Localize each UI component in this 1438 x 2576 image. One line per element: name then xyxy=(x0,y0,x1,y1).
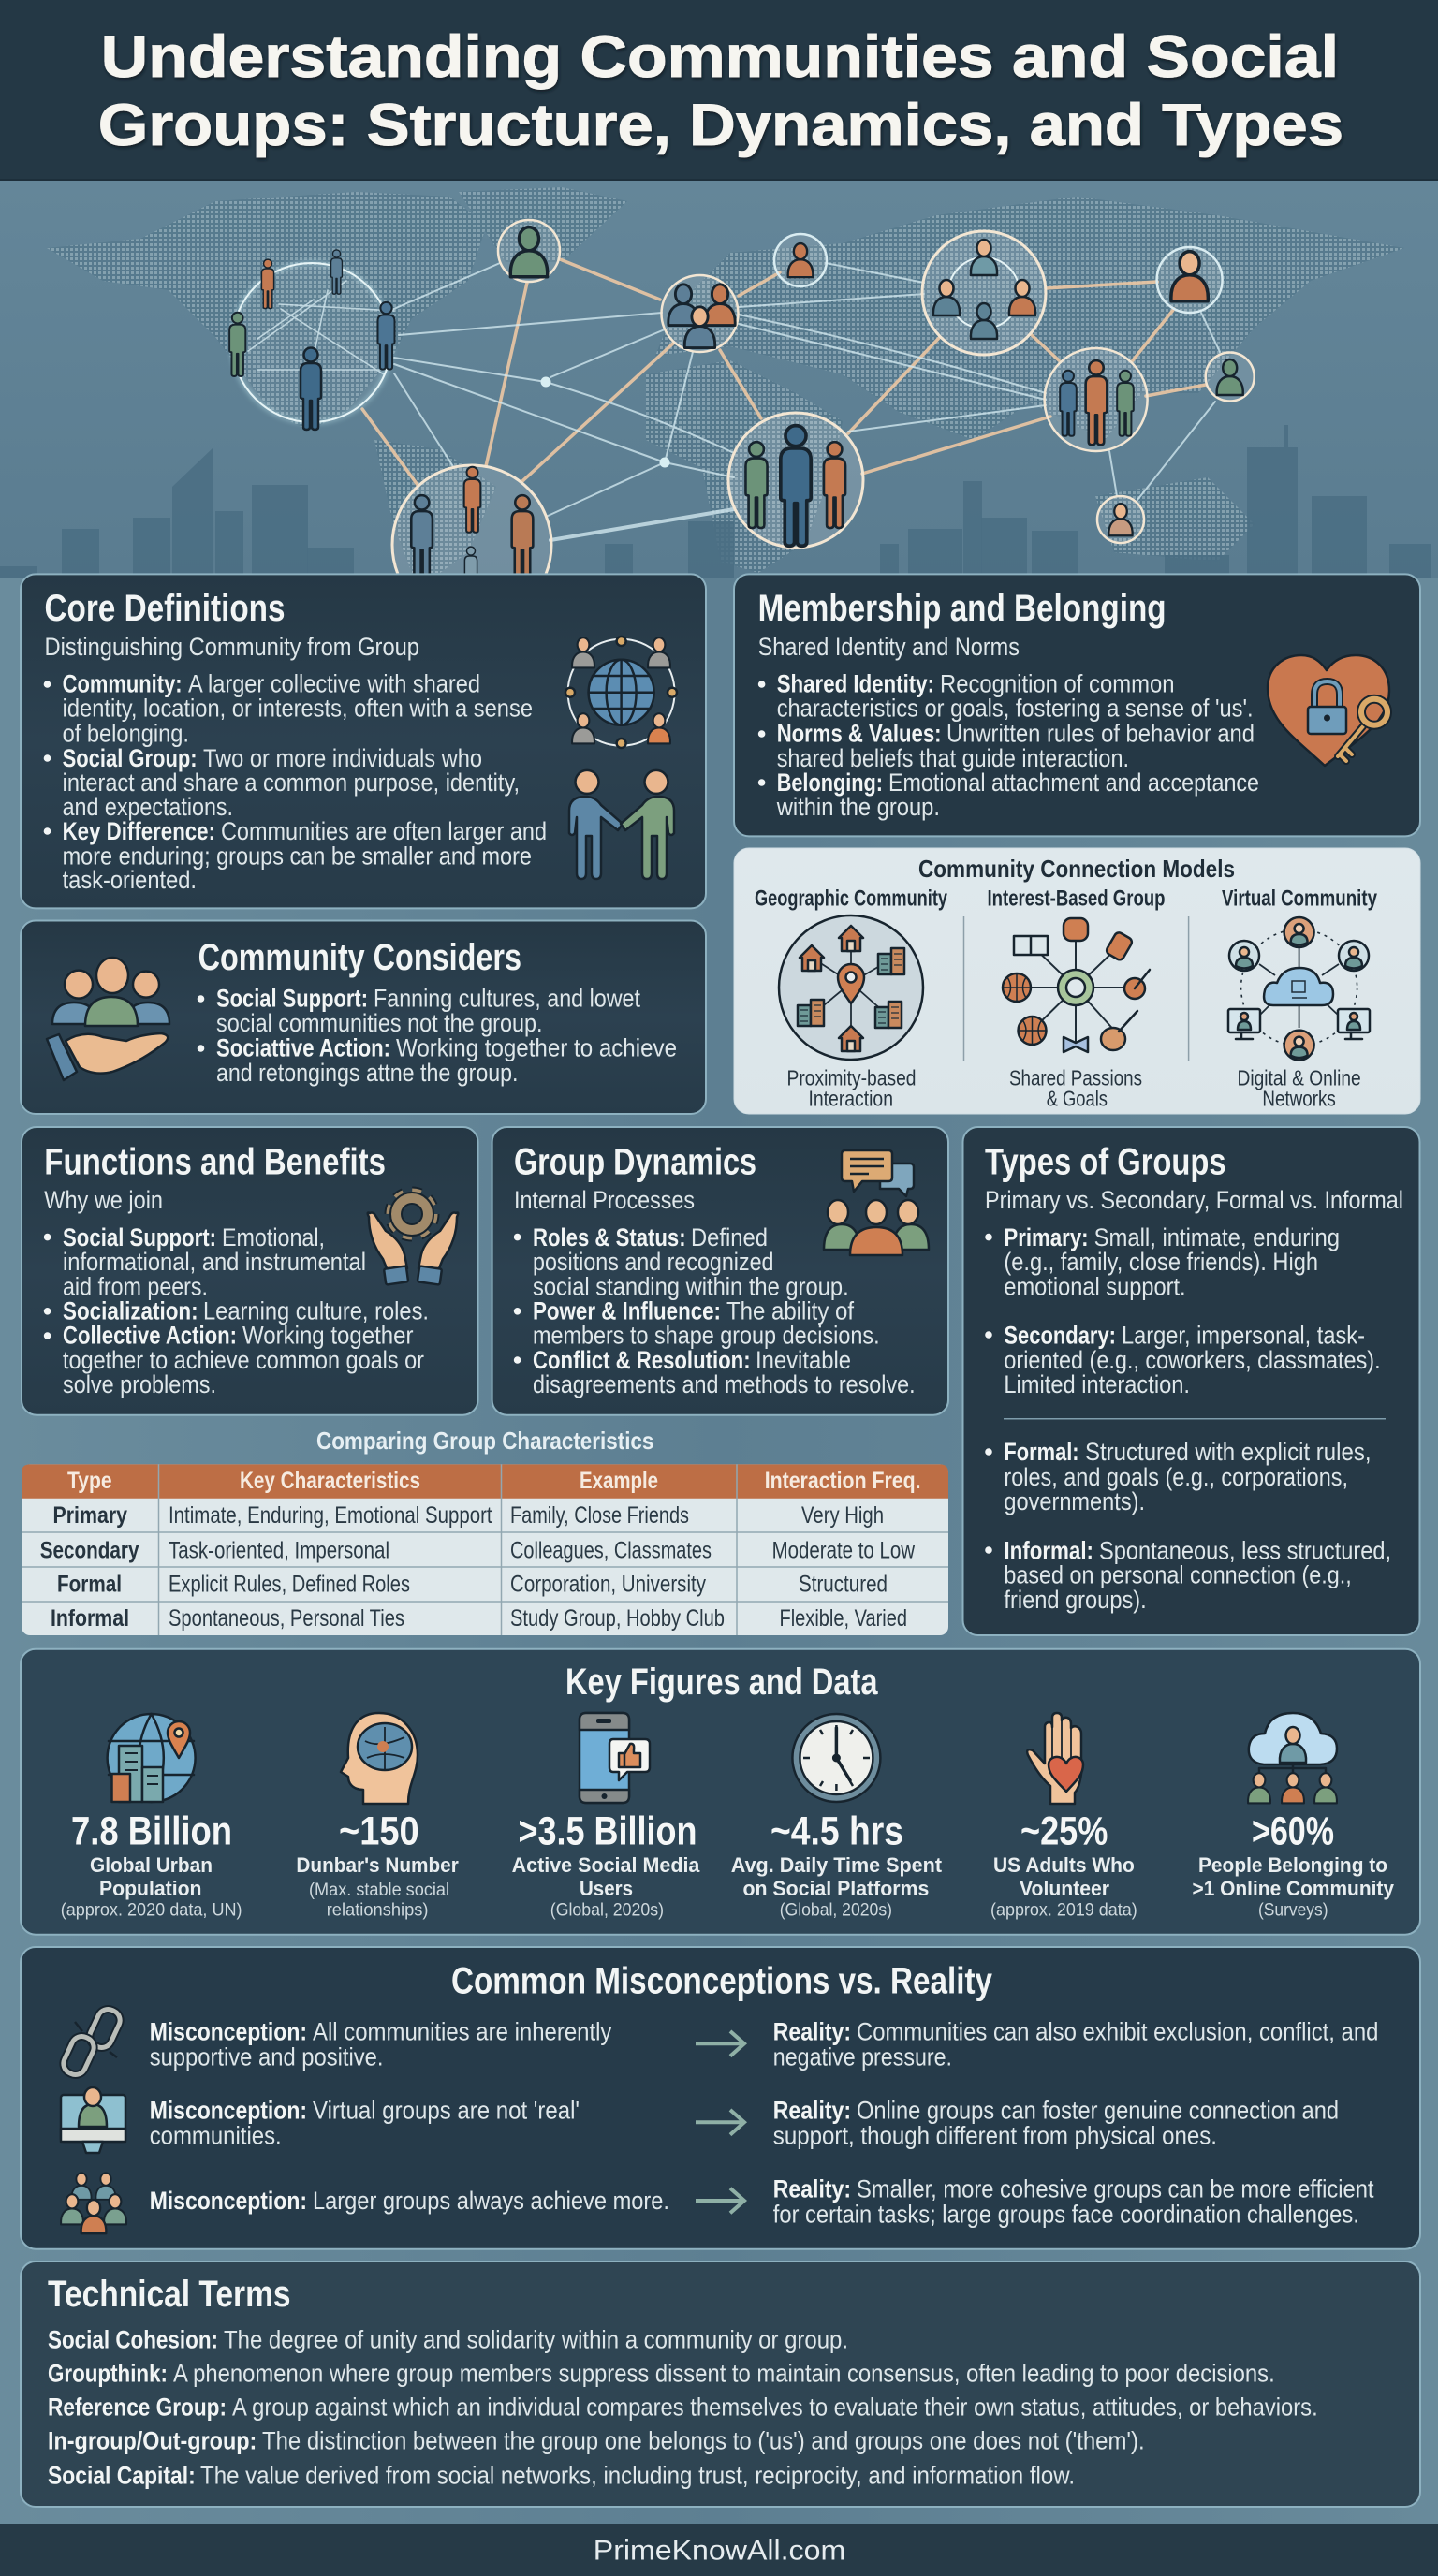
caption: shared passions and goals xyxy=(1009,1065,1142,1111)
term: in-group/out-group: The distinction between the group one belongs to ('us') and groups one does not ('them'). xyxy=(262,2427,1145,2455)
panel: membership and belonging xyxy=(734,574,1420,836)
bullet: social group: and expectations. xyxy=(63,793,233,821)
label: relationships) xyxy=(327,1901,429,1921)
misconception text xyxy=(150,2187,669,2215)
caption: shared passions and goals: & Goals xyxy=(1047,1087,1108,1111)
bullet: sociattive action: Sociattive Action: xyxy=(216,1033,390,1061)
header band xyxy=(0,0,1438,181)
hero: world network illustration xyxy=(0,181,1438,624)
misconception text: supportive and positive. xyxy=(150,2043,384,2071)
bullet: roles and status: Defined xyxy=(691,1223,768,1251)
panel: core definitions xyxy=(21,574,706,908)
bullet: formal: Structured with explicit rules, xyxy=(1085,1438,1371,1466)
label xyxy=(512,1853,700,1921)
bullet: secondary: oriented (e.g., coworkers, classmates). xyxy=(1004,1346,1381,1374)
network junction dots xyxy=(541,376,670,468)
stat: us adults who volunteer xyxy=(990,1713,1137,1921)
term: reference group: A group against which an individual compares themselves to evaluate their own status, attitudes, or behaviors. xyxy=(232,2393,1318,2422)
row 3 xyxy=(61,2173,1374,2233)
bullet: social support: Emotional, xyxy=(222,1223,325,1251)
icon: head with brain xyxy=(341,1713,418,1804)
subheading: Internal Processes xyxy=(514,1186,695,1214)
column heading: interest-based group: Interest-Based Group xyxy=(987,886,1165,911)
bullet: roles and status xyxy=(514,1223,849,1300)
label xyxy=(731,1853,943,1921)
term: social cohesion: The degree of unity and solidarity within a community or group. xyxy=(224,2325,848,2353)
table row: formal: Structured xyxy=(799,1572,888,1598)
table row: secondary xyxy=(40,1537,916,1563)
bullet: sociattive action xyxy=(198,1033,677,1087)
reality text xyxy=(773,2174,1374,2229)
bullet: conflict and resolution: Inevitable xyxy=(756,1346,851,1374)
bullet: socialization: Learning culture, roles. xyxy=(203,1297,429,1325)
network connection lines: orange xyxy=(362,259,1206,485)
bullet: community: of belonging. xyxy=(63,719,189,747)
term: social capital: The value derived from social networks, including trust, reciprocity, and information flow. xyxy=(200,2461,1075,2489)
bullet: primary: (e.g., family, close friends). High xyxy=(1004,1248,1318,1276)
icon: phone with thumbs up xyxy=(580,1713,650,1803)
panel: technical terms xyxy=(21,2261,1420,2507)
label xyxy=(990,1853,1137,1921)
bullet: formal xyxy=(985,1438,1371,1515)
bullet: social support: aid from peers. xyxy=(63,1272,208,1300)
term: groupthink: A phenomenon where group members suppress dissent to maintain consensus, often leading to poor decisions. xyxy=(173,2359,1275,2387)
table row: primary xyxy=(52,1502,884,1529)
bullet: norms and values: Norms & Values: xyxy=(777,719,942,747)
misconception text xyxy=(150,2096,580,2150)
label xyxy=(61,1853,242,1921)
table row: formal: Explicit Rules, Defined Roles xyxy=(169,1572,410,1598)
bullet: shared identity: Recognition of common xyxy=(940,670,1174,698)
heading: Key Figures and Data xyxy=(565,1661,878,1703)
value: >3.5 Billion xyxy=(519,1809,697,1854)
bullet: key difference xyxy=(44,817,547,894)
panel: group dynamics xyxy=(492,1127,948,1415)
table row: primary: Very High xyxy=(801,1502,884,1529)
table row: formal: Formal xyxy=(57,1572,122,1598)
bullet: primary xyxy=(985,1223,1340,1300)
node: bottom left group xyxy=(392,465,551,624)
table header row: Interaction Freq. xyxy=(765,1468,921,1494)
bullet: informal: friend groups). xyxy=(1004,1586,1147,1614)
label: Global Urban xyxy=(90,1853,213,1877)
caption: proximity-based interaction xyxy=(786,1065,916,1111)
bullet: community: A larger collective with shared xyxy=(188,670,480,698)
bullet: social group: Social Group: xyxy=(63,744,198,772)
footer xyxy=(0,2524,1438,2576)
label: >1 Online Community xyxy=(1193,1877,1395,1900)
table row: formal xyxy=(57,1572,888,1598)
bullet: social support xyxy=(44,1223,366,1300)
bullet: secondary xyxy=(985,1321,1381,1398)
label: (Surveys) xyxy=(1258,1901,1328,1921)
bullet: power and influence xyxy=(514,1297,880,1350)
panel: community considers xyxy=(21,921,706,1114)
bullet: secondary: Secondary: xyxy=(1004,1321,1116,1349)
table header row: Key Characteristics xyxy=(240,1468,420,1494)
node: small orange member xyxy=(774,234,827,286)
network connection lines: light blue xyxy=(248,263,1220,540)
bullet: socialization: Socialization: xyxy=(63,1297,198,1325)
icon: cloud with people tree xyxy=(1248,1713,1337,1803)
bullet: formal: roles, and goals (e.g., corporations, xyxy=(1004,1463,1348,1491)
reality text xyxy=(773,2017,1378,2071)
bullet: roles and status: positions and recognized xyxy=(533,1248,773,1276)
label: Users xyxy=(580,1877,633,1900)
node: large center trio xyxy=(728,413,863,548)
node: central group xyxy=(661,275,738,352)
bullet: belonging: Emotional attachment and acceptance xyxy=(888,768,1259,797)
title: Groups: Structure, Dynamics, and Types xyxy=(98,93,1343,158)
table row: primary: Intimate, Enduring, Emotional Support xyxy=(169,1502,492,1529)
misconception text: Larger groups always achieve more. xyxy=(313,2187,669,2215)
icon: hands holding gear xyxy=(368,1192,458,1285)
caption: shared passions and goals: Shared Passions xyxy=(1009,1065,1142,1090)
caption: proximity-based interaction: Interaction xyxy=(809,1087,893,1111)
bullet: collective action: Working together xyxy=(242,1322,414,1350)
bullet: secondary: Larger, impersonal, task- xyxy=(1122,1321,1365,1349)
label: Dunbar's Number xyxy=(296,1853,459,1877)
table row: formal: Corporation, University xyxy=(510,1572,706,1598)
bullet: socialization xyxy=(44,1297,429,1325)
bullet: primary: Primary: xyxy=(1004,1223,1089,1251)
bullet: shared identity: Shared Identity: xyxy=(777,670,934,698)
label: US Adults Who xyxy=(993,1853,1135,1877)
row 1 xyxy=(60,2006,1378,2078)
bullet: sociattive action: Working together to achieve xyxy=(396,1033,677,1061)
table: comparing group characteristics xyxy=(22,1464,948,1635)
stat: global urban population xyxy=(61,1714,242,1921)
bullet: roles and status: Roles & Status: xyxy=(533,1223,686,1251)
node: four person cluster xyxy=(922,231,1046,355)
bullet: shared identity xyxy=(758,670,1254,723)
misconception text: Misconception: xyxy=(150,2187,307,2215)
bullet: conflict and resolution: Conflict & Resolution: xyxy=(533,1346,751,1374)
world map dotted continents xyxy=(47,187,1404,573)
label: (approx. 2020 data, UN) xyxy=(61,1901,242,1921)
node: lower right member xyxy=(1097,496,1144,543)
diagram: virtual community xyxy=(1228,917,1370,1061)
bullet: collective action: together to achieve common goals or xyxy=(63,1346,424,1374)
misconception text: All communities are inherently xyxy=(313,2017,612,2045)
bullet: informal: based on personal connection (e.g., xyxy=(1004,1561,1352,1589)
stat: online community membership xyxy=(1193,1713,1395,1921)
bullet: social support: social communities not the group. xyxy=(216,1009,543,1037)
heading: Community Considers xyxy=(198,937,521,978)
bullet: social support: Fanning cultures, and lowet xyxy=(374,985,640,1013)
bullet: social support: Social Support: xyxy=(63,1223,216,1251)
heading: Functions and Benefits xyxy=(44,1142,386,1183)
term: social capital: Social Capital: xyxy=(48,2461,196,2489)
table row: secondary: Secondary xyxy=(40,1537,139,1563)
icon: broken chain xyxy=(60,2006,124,2078)
caption: digital and online networks xyxy=(1238,1065,1361,1111)
label: Volunteer xyxy=(1020,1877,1109,1900)
label: Population xyxy=(99,1877,202,1900)
icon: clock xyxy=(792,1714,880,1802)
icon: hand with heart xyxy=(1027,1713,1083,1804)
label xyxy=(296,1853,459,1921)
icon: crowd of people xyxy=(61,2173,126,2233)
bullet: informal: Informal: xyxy=(1004,1537,1093,1565)
diagram: geographic community xyxy=(779,915,923,1060)
bullet: key difference: task-oriented. xyxy=(63,866,197,894)
bullet: collective action: Collective Action: xyxy=(63,1322,237,1350)
bullet: social support: informational, and instrumental xyxy=(63,1248,366,1276)
table row: informal: Study Group, Hobby Club xyxy=(510,1605,725,1632)
arrow xyxy=(696,2031,744,2056)
misconception text: Misconception: xyxy=(150,2017,307,2045)
label: (approx. 2019 data) xyxy=(990,1901,1137,1921)
bullet: key difference: Key Difference: xyxy=(63,817,215,845)
term: reference group: Reference Group: xyxy=(48,2393,227,2422)
bullet: shared identity: characteristics or goals, fostering a sense of 'us'. xyxy=(777,695,1254,723)
bullet: social support: Social Support: xyxy=(216,985,368,1013)
node: far right member xyxy=(1206,352,1255,401)
misconception text: Misconception: xyxy=(150,2096,307,2124)
bullet: social support xyxy=(198,985,640,1037)
heading: Technical Terms xyxy=(48,2274,290,2315)
table header row xyxy=(67,1468,921,1494)
term: groupthink: Groupthink: xyxy=(48,2359,168,2387)
bullet: formal: Formal: xyxy=(1004,1438,1079,1466)
subheading: Why we join xyxy=(44,1186,163,1214)
label: Avg. Daily Time Spent xyxy=(731,1853,943,1877)
bullet: primary: emotional support. xyxy=(1004,1272,1186,1300)
reality text: Communities can also exhibit exclusion, conflict, and xyxy=(857,2017,1378,2045)
reality text: Online groups can foster genuine connection and xyxy=(857,2096,1339,2124)
row 2 xyxy=(61,2087,1339,2153)
panel: key figures and data xyxy=(21,1649,1420,1935)
table row: secondary: Colleagues, Classmates xyxy=(510,1537,712,1563)
bullet: sociattive action: and retongings attne the group. xyxy=(216,1059,519,1087)
reality text: Smaller, more cohesive groups can be more efficient xyxy=(857,2174,1374,2203)
bullet: formal: governments). xyxy=(1004,1487,1145,1515)
reality text: Reality: xyxy=(773,2174,851,2203)
value: ~150 xyxy=(339,1809,419,1854)
city skyline silhouette xyxy=(0,425,1431,578)
node: trio right xyxy=(1045,348,1148,451)
table row: primary: Family, Close Friends xyxy=(510,1502,689,1529)
bullet: informal: Spontaneous, less structured, xyxy=(1099,1537,1391,1565)
table row: secondary: Moderate to Low xyxy=(772,1537,916,1563)
panel: community connection models xyxy=(734,848,1420,1114)
bullet: key difference: more enduring; groups can be smaller and more xyxy=(63,842,532,870)
diagram: interest-based group xyxy=(1003,918,1150,1052)
icon: speech bubbles and group xyxy=(824,1150,929,1255)
bullet: community xyxy=(44,670,533,747)
bullet: norms and values: shared beliefs that guide interaction. xyxy=(777,744,1129,772)
bullet: community: Community: xyxy=(63,670,183,698)
heading: Types of Groups xyxy=(985,1142,1226,1183)
table row: primary: Primary xyxy=(52,1502,127,1529)
node: large left community circle xyxy=(229,250,395,430)
icon: globe with people ring xyxy=(565,637,677,748)
column heading: virtual community: Virtual Community xyxy=(1222,886,1378,911)
bullet: informal xyxy=(985,1537,1391,1614)
label: (Global, 2020s) xyxy=(550,1901,664,1921)
table header row: Type xyxy=(67,1468,112,1494)
heading: Membership and Belonging xyxy=(758,588,1167,629)
bullet: norms and values: Unwritten rules of behavior and xyxy=(946,719,1255,747)
reality text: negative pressure. xyxy=(773,2043,952,2071)
bullet: secondary: Limited interaction. xyxy=(1004,1370,1190,1398)
bullet: belonging xyxy=(758,768,1259,821)
stat: daily time on social platforms xyxy=(731,1714,943,1921)
table row: informal xyxy=(51,1605,907,1632)
arrow xyxy=(696,2188,744,2213)
label: (Global, 2020s) xyxy=(780,1901,892,1921)
subheading: Distinguishing Community from Group xyxy=(45,633,419,661)
bullet: power and influence: The ability of xyxy=(726,1297,854,1325)
title xyxy=(98,24,1343,158)
bullet: roles and status: social standing within the group. xyxy=(533,1272,849,1300)
icon: person on monitor xyxy=(61,2087,125,2153)
bullet: belonging: Belonging: xyxy=(777,768,883,797)
node: top green member xyxy=(498,220,560,282)
stat: active social media users xyxy=(512,1713,700,1921)
heading: Common Misconceptions vs. Reality xyxy=(451,1960,993,2001)
table title: Comparing Group Characteristics xyxy=(316,1427,653,1455)
node: upper right member xyxy=(1157,247,1223,313)
bullet: collective action xyxy=(44,1322,424,1398)
value: ~4.5 hrs xyxy=(770,1809,903,1854)
term: in-group/out-group: In-group/Out-group: xyxy=(48,2427,257,2455)
panel: types of groups xyxy=(962,1127,1419,1635)
footer site name: PrimeKnowAll.com xyxy=(594,2535,845,2566)
caption: proximity-based interaction: Proximity-based xyxy=(786,1065,916,1090)
heading: Core Definitions xyxy=(45,588,285,629)
stat: dunbar's number xyxy=(296,1713,459,1921)
misconception text: communities. xyxy=(150,2122,282,2150)
table row: informal: Informal xyxy=(51,1605,129,1632)
reality text: for certain tasks; large groups face coordination challenges. xyxy=(773,2201,1359,2229)
bullet: norms and values xyxy=(758,719,1255,772)
misconception text xyxy=(150,2017,612,2071)
bullet: power and influence: Power & Influence: xyxy=(533,1297,721,1325)
panel: functions and benefits xyxy=(22,1127,477,1415)
reality text: Reality: xyxy=(773,2096,851,2124)
caption: digital and online networks: Digital & Online xyxy=(1238,1065,1361,1090)
bullet: conflict and resolution xyxy=(514,1346,916,1398)
label: (Max. stable social xyxy=(309,1881,449,1900)
arrow xyxy=(696,2110,744,2135)
table row: informal: Flexible, Varied xyxy=(779,1605,907,1632)
icon: hand holding people xyxy=(47,958,169,1080)
bullet: collective action: solve problems. xyxy=(63,1370,216,1398)
label xyxy=(1193,1853,1395,1921)
label: People Belonging to xyxy=(1198,1853,1387,1877)
panel: common misconceptions vs reality xyxy=(21,1947,1420,2249)
table row: secondary: Task-oriented, Impersonal xyxy=(169,1537,389,1563)
bullet: key difference: Communities are often larger and xyxy=(221,817,547,845)
value: >60% xyxy=(1252,1809,1334,1854)
bullet: conflict and resolution: disagreements and methods to resolve. xyxy=(533,1370,916,1398)
title: Understanding Communities and Social xyxy=(101,24,1339,90)
bullet: social group: Two or more individuals who xyxy=(203,744,482,772)
term: social cohesion: Social Cohesion: xyxy=(48,2325,218,2353)
bullet: primary: Small, intimate, enduring xyxy=(1094,1223,1340,1251)
value: 7.8 Billion xyxy=(71,1809,232,1854)
heading: Group Dynamics xyxy=(514,1142,756,1183)
reality text xyxy=(773,2096,1339,2150)
icon: heart with lock and key xyxy=(1268,655,1389,766)
bullet: belonging: within the group. xyxy=(776,793,940,821)
label: Active Social Media xyxy=(512,1853,700,1877)
value: ~25% xyxy=(1020,1809,1108,1854)
bullet: social group: interact and share a common purpose, identity, xyxy=(63,768,520,797)
reality text: support, though different from physical ones. xyxy=(773,2122,1217,2150)
bullet: power and influence: members to shape group decisions. xyxy=(533,1322,880,1350)
caption: digital and online networks: Networks xyxy=(1262,1087,1336,1111)
icon: globe and city xyxy=(108,1714,196,1802)
label: on Social Platforms xyxy=(743,1877,929,1900)
table row: informal: Spontaneous, Personal Ties xyxy=(169,1605,404,1632)
subheading: Shared Identity and Norms xyxy=(758,633,1020,661)
bullet: social group xyxy=(44,744,520,821)
misconception text: Virtual groups are not 'real' xyxy=(313,2096,580,2124)
column heading: geographic community: Geographic Community xyxy=(755,886,947,911)
reality text: Reality: xyxy=(773,2017,851,2045)
title: Community Connection Models xyxy=(918,855,1235,883)
table header row: Example xyxy=(580,1468,658,1494)
icon: handshake xyxy=(569,770,674,879)
bullet: community: identity, location, or interests, often with a sense xyxy=(63,695,533,723)
